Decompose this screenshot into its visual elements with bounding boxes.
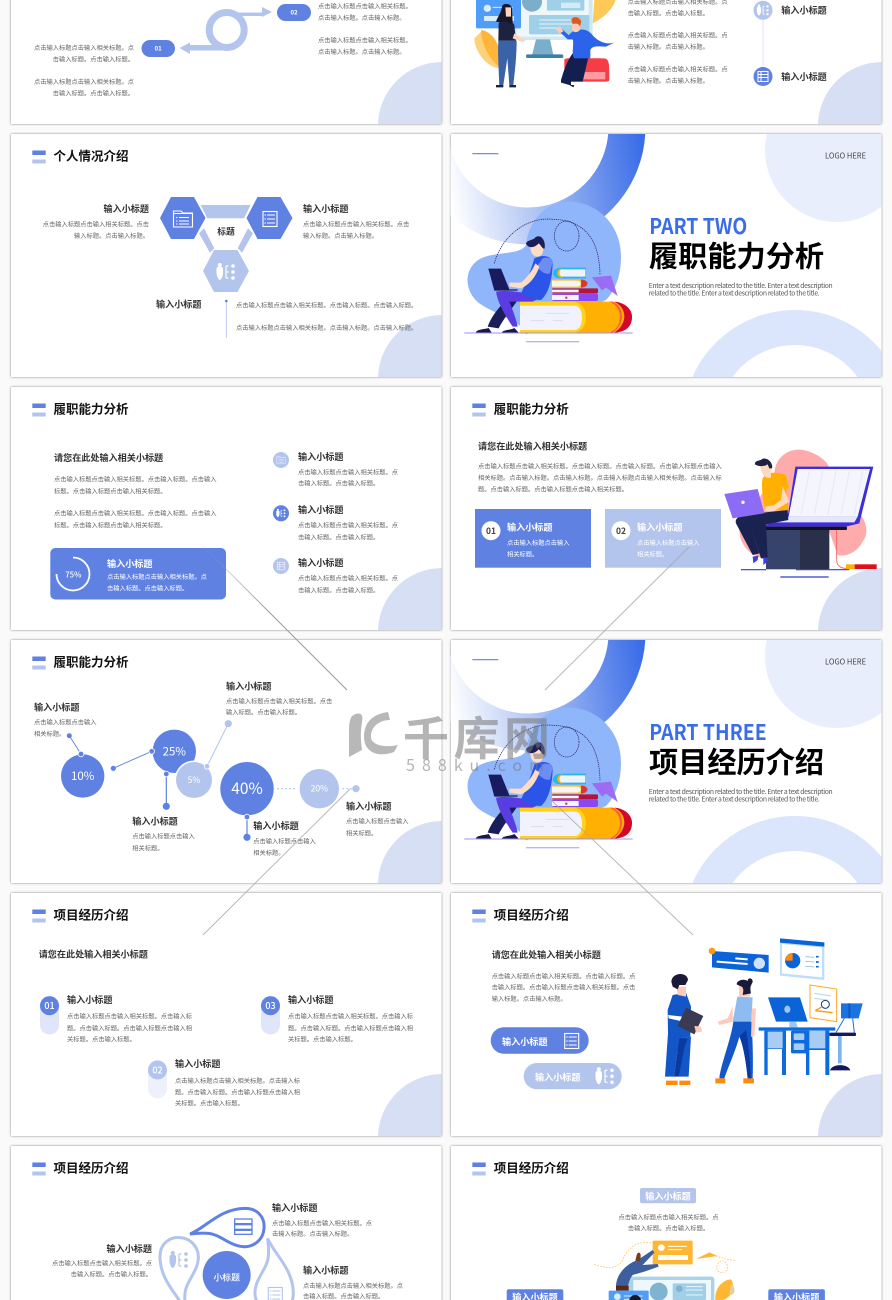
card 01: 输入小标题 bbox=[507, 520, 552, 534]
illustration: two people and monitor bbox=[474, 0, 616, 87]
title: 履职能力分析 bbox=[494, 399, 569, 418]
item 01: 题。点击输入标题。点击输入标题点击输入相 bbox=[67, 1023, 192, 1032]
label b: 点击输入标题点击输入相关标题。点击 bbox=[226, 696, 332, 705]
item 01: 点击输入标题点击输入相关标题。点击输入标 bbox=[67, 1012, 192, 1021]
intro text: 点击输入标题点击输入相关标题。点击输入标题。点击输入 bbox=[54, 475, 217, 484]
subheading: 请您在此处输入相关小标题 bbox=[39, 946, 148, 960]
left text: 点击输入标题点击输入相关标题。点击 bbox=[43, 220, 149, 229]
watermark: logo and site name: 588ku.com bbox=[406, 752, 544, 776]
title: 履职能力分析 bbox=[54, 399, 129, 418]
card 01: 01 bbox=[486, 525, 496, 537]
label c: 点击输入标题点击输入 bbox=[132, 832, 196, 841]
intro text: 请您在此处输入相关小标题 bbox=[478, 438, 587, 452]
panel: project experience numbered items bbox=[11, 893, 442, 1136]
item 02: 关标题。点击输入标题。 bbox=[175, 1099, 244, 1108]
label top: 击输入标题。点击输入标题。 bbox=[272, 1229, 353, 1238]
label e: 输入小标题 bbox=[346, 798, 391, 812]
right text bbox=[303, 201, 409, 240]
label top: 输入小标题 bbox=[272, 1200, 317, 1214]
item 02 bbox=[148, 1056, 300, 1108]
label left bbox=[52, 1241, 152, 1278]
label d: 相关标题。 bbox=[253, 848, 285, 857]
left body text: 击输入标题。点击输入标题。 bbox=[53, 54, 134, 63]
body text: 击输入标题。点击输入标题。 bbox=[628, 8, 709, 17]
item 02: 输入小标题 bbox=[175, 1056, 220, 1070]
top tag bbox=[618, 1188, 718, 1233]
body text: 击输入标题。点击输入标题。 bbox=[628, 42, 709, 51]
bubble chart: 40% bbox=[231, 777, 263, 799]
pill button 1 bbox=[491, 1027, 589, 1054]
title: 项目经历介绍 bbox=[494, 905, 569, 924]
description: Enter a text description related to the title. Enter a text description bbox=[649, 786, 833, 796]
item 3: 击输入标题。点击输入标题。 bbox=[298, 585, 379, 594]
bottom text bbox=[156, 296, 417, 338]
panel: ability analysis cards bbox=[451, 387, 882, 630]
label c: 输入小标题 bbox=[132, 814, 178, 828]
right text: 输入小标题 bbox=[303, 201, 348, 215]
item 3: 点击输入标题点击输入相关标题。点 bbox=[298, 573, 398, 582]
right body text bbox=[318, 1, 412, 56]
watermark: logo and site name: 千库网 bbox=[403, 703, 550, 769]
panel: project experience tags bbox=[451, 1146, 882, 1300]
label a bbox=[34, 700, 97, 738]
label a: 输入小标题 bbox=[34, 700, 79, 714]
label d: 点击输入标题点击输入 bbox=[253, 836, 317, 845]
intro text bbox=[54, 450, 217, 529]
hexagon diagram: 标题 bbox=[217, 225, 235, 238]
left text: 输入小标题 bbox=[104, 201, 149, 215]
card 02: 输入小标题 bbox=[637, 520, 682, 534]
card 02: 相关标题。 bbox=[637, 549, 668, 558]
callout card 75%: 75% bbox=[65, 569, 82, 580]
left text: 输入标题。点击输入标题。 bbox=[74, 231, 149, 240]
item 03: 点击输入标题点击输入相关标题。点击输入标 bbox=[288, 1012, 413, 1021]
callout card 75%: 击输入标题。点击输入标题。 bbox=[107, 583, 188, 592]
item 03: 输入小标题 bbox=[288, 992, 333, 1006]
left body text: 点击输入标题点击输入相关标题。点 bbox=[34, 43, 134, 52]
pill button 2 bbox=[524, 1063, 622, 1089]
item 01: 输入小标题 bbox=[67, 992, 112, 1006]
description bbox=[649, 786, 833, 804]
right body text: 点击输入标题点击输入相关标题。 bbox=[318, 35, 412, 44]
pill 02 bbox=[277, 4, 311, 21]
hexagon diagram bbox=[160, 197, 292, 292]
card 02: 点击输入标题点击输入 bbox=[637, 538, 700, 547]
subheadings: 输入小标题 bbox=[781, 3, 827, 17]
description: related to the title. Enter a text description related to the title. bbox=[649, 288, 820, 298]
right body text: 点击输入标题。点击输入标题。 bbox=[318, 13, 406, 22]
item 2: 输入小标题 bbox=[298, 502, 343, 516]
card 01: 相关标题。 bbox=[507, 549, 538, 558]
title: 履职能力分析 bbox=[54, 652, 129, 671]
label e: 相关标题。 bbox=[346, 828, 377, 837]
item 01 bbox=[40, 992, 192, 1043]
logo text: LOGO HERE bbox=[825, 657, 866, 668]
bubble chart: 10% bbox=[71, 768, 95, 784]
bubble chart: 25% bbox=[163, 744, 186, 760]
label b: 输入标题。点击输入标题。 bbox=[226, 708, 301, 717]
intro text: 请您在此处输入相关小标题 bbox=[54, 450, 163, 464]
item 2: 点击输入标题点击输入相关标题。点 bbox=[298, 521, 398, 530]
label a: 点击输入标题点击输入 bbox=[34, 718, 97, 727]
item 01: 01 bbox=[44, 999, 55, 1012]
description: related to the title. Enter a text description related to the title. bbox=[649, 794, 820, 804]
timeline icons bbox=[754, 1, 772, 86]
title: 项目经历介绍 bbox=[54, 905, 129, 924]
body text bbox=[628, 0, 728, 85]
panel: ability analysis 75% bbox=[11, 387, 442, 630]
intro text: 输入标题。点击输入标题。 bbox=[492, 994, 567, 1003]
body text: 点击输入标题点击输入相关标题。点 bbox=[628, 65, 728, 74]
label d bbox=[253, 818, 317, 857]
center label: 小标题 bbox=[213, 1270, 240, 1284]
right text: 点击输入标题点击输入相关标题。点击 bbox=[303, 220, 409, 229]
callout card 75%: 输入小标题 bbox=[107, 556, 152, 570]
pill 01: 01 bbox=[155, 44, 162, 52]
panel: personal introduction bbox=[11, 134, 442, 377]
intro text: 点击输入标题点击输入相关标题。点击输入标题。点 bbox=[492, 971, 635, 980]
illustration: person on desk with giant book bbox=[724, 450, 877, 577]
top tag: 点击输入标题点击输入相关标题。点 bbox=[618, 1212, 718, 1221]
right body text: 点击输入标题点击输入相关标题。 bbox=[318, 1, 412, 10]
label b: 输入小标题 bbox=[226, 678, 271, 692]
item 1: 点击输入标题点击输入相关标题。点 bbox=[298, 467, 398, 476]
intro text: 标题。点击输入标题点击输入相关标题。 bbox=[54, 520, 166, 529]
item 03: 题。点击输入标题。点击输入标题点击输入相 bbox=[288, 1023, 413, 1032]
intro text: 击输入标题。点击输入标题点击输入相关标题。点击 bbox=[492, 983, 635, 992]
label d: 输入小标题 bbox=[253, 818, 299, 832]
intro text: 相关标题。点击输入标题。点击输入标题。点击输入标题点击输入相关标题。点击输入标 bbox=[478, 473, 722, 482]
panel: part two cover bbox=[429, 28, 892, 516]
item 01: 关标题。点击输入标题。 bbox=[67, 1034, 136, 1043]
item 02: 点击输入标题点击输入相关标题。点击输入标 bbox=[175, 1076, 300, 1085]
label top bbox=[272, 1200, 372, 1238]
intro text: 标题。点击输入标题点击输入相关标题。 bbox=[54, 486, 166, 495]
title: 个人情况介绍 bbox=[54, 146, 129, 165]
panel: slide top left, loop process bbox=[11, 0, 442, 124]
left body text: 击输入标题。点击输入标题。 bbox=[53, 88, 134, 97]
pill 02: 02 bbox=[290, 8, 298, 16]
bottom text: 输入小标题 bbox=[156, 296, 201, 310]
item 2: 击输入标题。点击输入标题。 bbox=[298, 532, 379, 541]
part label: PART TWO bbox=[649, 210, 747, 241]
label a: 相关标题。 bbox=[34, 729, 65, 738]
body text: 点击输入标题点击输入相关标题。点 bbox=[628, 31, 728, 40]
title: 项目经历介绍 bbox=[54, 1158, 129, 1177]
item 03: 关标题。点击输入标题。 bbox=[288, 1034, 357, 1043]
intro text bbox=[478, 438, 722, 493]
loop arrow bbox=[180, 7, 272, 54]
item 3: 输入小标题 bbox=[298, 555, 343, 569]
intro text: 点击输入标题点击输入相关标题。点击输入标题。点击输入 bbox=[54, 509, 217, 518]
card 01: 点击输入标题点击输入 bbox=[507, 538, 570, 547]
item 03: 03 bbox=[265, 999, 276, 1012]
watermark: logo and site name bbox=[349, 703, 550, 776]
title: 项目经历介绍 bbox=[494, 1158, 569, 1177]
left text bbox=[43, 201, 149, 240]
part label: PART THREE bbox=[649, 716, 767, 747]
label c: 相关标题。 bbox=[132, 843, 164, 852]
panel: project experience teardrop diagram bbox=[11, 1146, 442, 1300]
watermark: diagonal lines bbox=[197, 540, 693, 935]
body text: 击输入标题。点击输入标题。 bbox=[628, 76, 709, 85]
label top: 点击输入标题点击输入相关标题。点 bbox=[272, 1218, 372, 1227]
left body text: 点击输入标题点击输入相关标题。点 bbox=[34, 77, 134, 86]
bottom text: 点击输入标题点击输入相关标题。点击输入标题。点击输入标题。 bbox=[236, 300, 417, 309]
item 1 bbox=[273, 449, 398, 488]
label right: 点击输入标题点击输入相关标题。点 bbox=[303, 1281, 403, 1290]
item 02: 02 bbox=[152, 1063, 163, 1076]
intro text: 题。点击输入标题。点击输入标题点击输入相关标题。 bbox=[478, 484, 628, 493]
panel: project experience office illustration bbox=[451, 893, 882, 1136]
item 03 bbox=[261, 992, 413, 1043]
bubble chart: 20% bbox=[311, 783, 328, 795]
callout card 75% bbox=[50, 548, 226, 600]
pill button 1: 输入小标题 bbox=[502, 1034, 547, 1048]
label e: 点击输入标题点击输入 bbox=[346, 817, 409, 826]
illustration: team and screen bbox=[594, 1241, 736, 1300]
panel: part three cover bbox=[429, 534, 892, 1022]
item 1: 输入小标题 bbox=[298, 449, 343, 463]
section title: 项目经历介绍 bbox=[649, 740, 824, 782]
left body text bbox=[34, 43, 134, 97]
item 1: 击输入标题。点击输入标题。 bbox=[298, 479, 379, 488]
logo text: LOGO HERE bbox=[825, 151, 866, 162]
label b bbox=[226, 678, 332, 717]
bubble chart bbox=[61, 720, 360, 841]
label left: 击输入标题。点击输入标题。 bbox=[71, 1269, 152, 1278]
label right bbox=[303, 1262, 403, 1300]
label left: 点击输入标题点击输入相关标题。点 bbox=[52, 1259, 152, 1268]
intro text: 请您在此处输入相关小标题 bbox=[492, 947, 601, 961]
illustration: person with laptop on books bbox=[429, 534, 892, 1022]
panel: slide top right, colleagues illustration bbox=[451, 0, 882, 124]
bottom text: 点击输入标题点击输入相关标题。点击输入标题。点击输入标题。 bbox=[236, 323, 417, 332]
subheadings: 输入小标题 bbox=[781, 69, 827, 83]
top tag: 输入小标题 bbox=[645, 1188, 691, 1202]
label e bbox=[346, 798, 409, 837]
item 02: 题。点击输入标题。点击输入标题点击输入相 bbox=[175, 1087, 300, 1096]
card 02 bbox=[605, 509, 721, 568]
pill button 2: 输入小标题 bbox=[535, 1070, 580, 1084]
illustration: person with laptop on books bbox=[429, 28, 892, 516]
item 3 bbox=[273, 555, 398, 594]
teardrop diagram bbox=[160, 1208, 293, 1300]
right text: 输入标题。点击输入标题。 bbox=[303, 231, 378, 240]
label left: 输入小标题 bbox=[107, 1241, 152, 1255]
label right: 输入小标题 bbox=[303, 1262, 348, 1276]
description: Enter a text description related to the title. Enter a text description bbox=[649, 280, 833, 290]
section title: 履职能力分析 bbox=[649, 234, 824, 276]
right body text: 点击输入标题。点击输入标题。 bbox=[318, 47, 406, 56]
label c bbox=[132, 814, 196, 852]
intro text bbox=[492, 947, 635, 1003]
description bbox=[649, 280, 833, 298]
intro text: 点击输入标题点击输入相关标题。点击输入标题。点击输入标题。点击输入标题点击输入 bbox=[478, 461, 722, 470]
top tag: 击输入标题。点击输入标题。 bbox=[628, 1224, 709, 1233]
pill 01 bbox=[142, 40, 175, 57]
item 2 bbox=[273, 502, 398, 541]
callout card 75%: 点击输入标题点击输入相关标题。点 bbox=[107, 572, 207, 581]
card 02: 02 bbox=[616, 525, 626, 537]
card 01 bbox=[475, 509, 591, 568]
panel: ability analysis percent bubbles bbox=[11, 640, 442, 883]
bubble chart: 5% bbox=[188, 774, 200, 786]
subheadings bbox=[781, 3, 827, 83]
illustration: office team bbox=[665, 938, 863, 1085]
